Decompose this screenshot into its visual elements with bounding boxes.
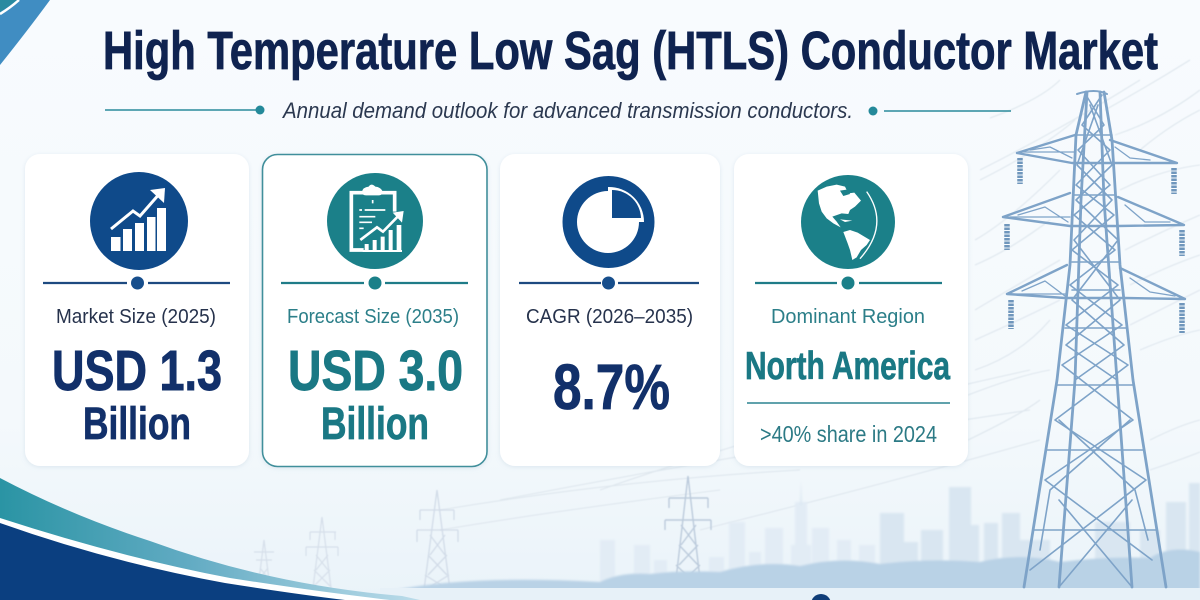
label: Dominant Region	[771, 305, 925, 328]
distant tower 4	[665, 476, 711, 588]
bottom-left swoosh	[0, 478, 420, 600]
main transmission tower	[1003, 91, 1185, 587]
icon: clipboard forecast	[327, 173, 423, 269]
city skyline	[395, 480, 1200, 590]
card: market size: Billion	[83, 398, 191, 449]
card: CAGR	[500, 154, 720, 466]
icon: growth chart	[90, 172, 188, 270]
card: market size	[25, 154, 249, 466]
label: Forecast Size (2035)	[287, 305, 459, 328]
label: CAGR (2026–2035)	[526, 305, 693, 328]
share note: >40% share in 2024	[760, 421, 937, 447]
background power lines	[440, 60, 1200, 530]
subtitle with ornaments: Annual demand outlook for advanced transmission conductors.	[281, 98, 853, 123]
distant tower 2	[306, 517, 338, 588]
cross arms	[1003, 135, 1185, 299]
icon: pie chart	[562, 176, 654, 268]
card: forecast size: Billion	[321, 398, 429, 449]
lattice bracing	[1030, 95, 1157, 587]
subtitle with ornaments	[105, 98, 1011, 123]
value: USD 3.0	[288, 339, 463, 403]
insulators	[1007, 158, 1182, 333]
card: dominant region	[734, 154, 968, 466]
card: forecast size	[262, 154, 487, 466]
distant tower 3	[417, 490, 458, 590]
label: Market Size (2025)	[56, 305, 216, 328]
value: 8.7%	[553, 351, 670, 423]
legs	[1024, 91, 1166, 587]
value: North America	[745, 345, 950, 388]
icon: globe	[801, 175, 895, 269]
ground band	[380, 588, 1200, 600]
foreground haze	[395, 550, 1200, 590]
distant tower 1	[254, 540, 274, 588]
top-left corner swoosh	[0, 0, 50, 65]
globe lakes	[840, 189, 850, 196]
bottom edge circle	[811, 594, 831, 600]
value: USD 1.3	[52, 339, 222, 403]
